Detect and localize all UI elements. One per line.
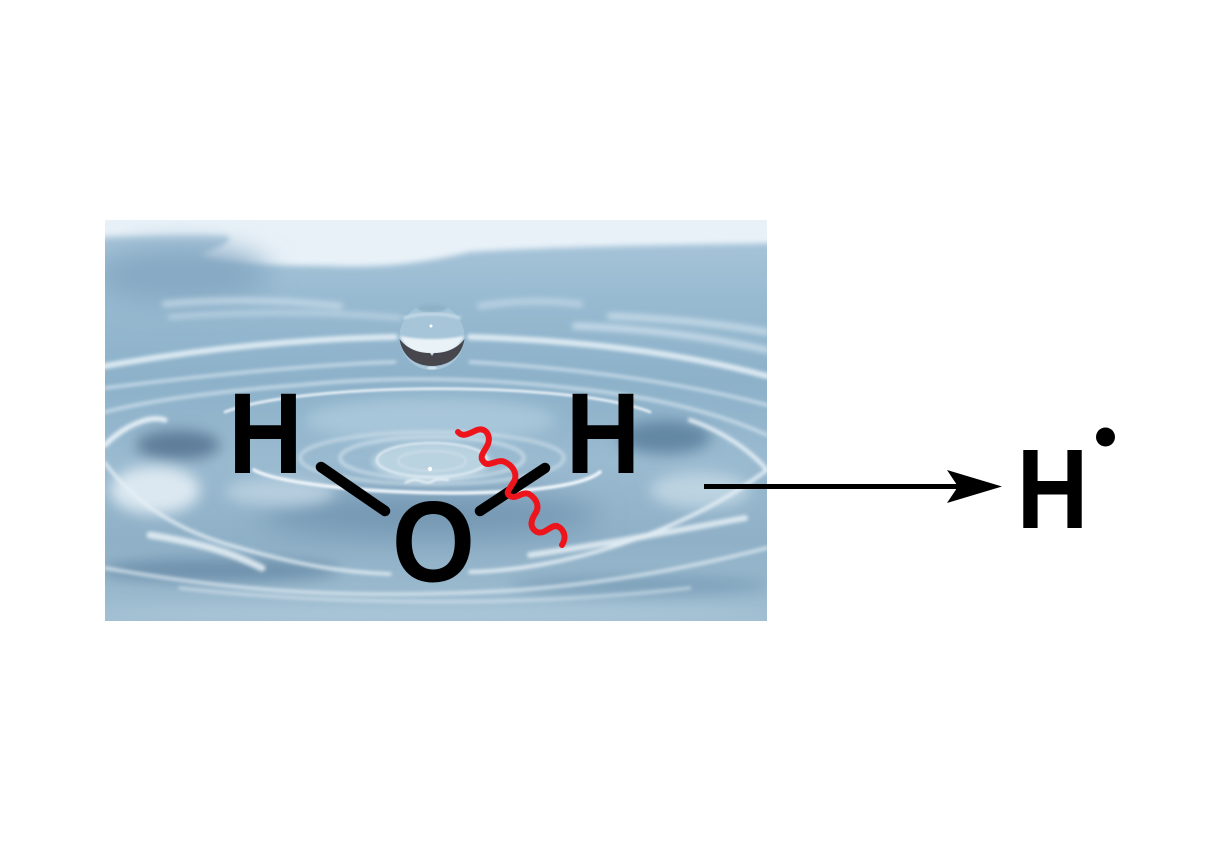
radical electron dot [1096, 428, 1115, 446]
dark and bright tonal patches [90, 247, 770, 621]
bond: left O-H [321, 467, 385, 511]
centre drip spot [405, 467, 449, 483]
foreground ripple highlights [105, 419, 767, 602]
icon: falling water droplet [400, 304, 464, 370]
diagram: water splitting into hydrogen radical [105, 220, 1115, 621]
product: hydrogen radical [1017, 426, 1115, 552]
mid ripple lines [105, 337, 767, 435]
main ripple rings [225, 389, 650, 493]
arrow: reaction direction [704, 470, 1002, 503]
pale background reflection [105, 220, 767, 270]
photo: water surface with ripples [90, 210, 777, 621]
atom label: oxygen: O [392, 477, 475, 606]
bond cleavage wavy line [458, 429, 564, 545]
atom label: hydrogen: H [1017, 426, 1088, 552]
water molecule: H2O structure [228, 370, 640, 606]
bond: right O-H [480, 468, 545, 511]
distant ripple lines [165, 300, 767, 350]
atom label: left hydrogen: H [228, 370, 303, 498]
atom label: right hydrogen: H [566, 370, 640, 498]
